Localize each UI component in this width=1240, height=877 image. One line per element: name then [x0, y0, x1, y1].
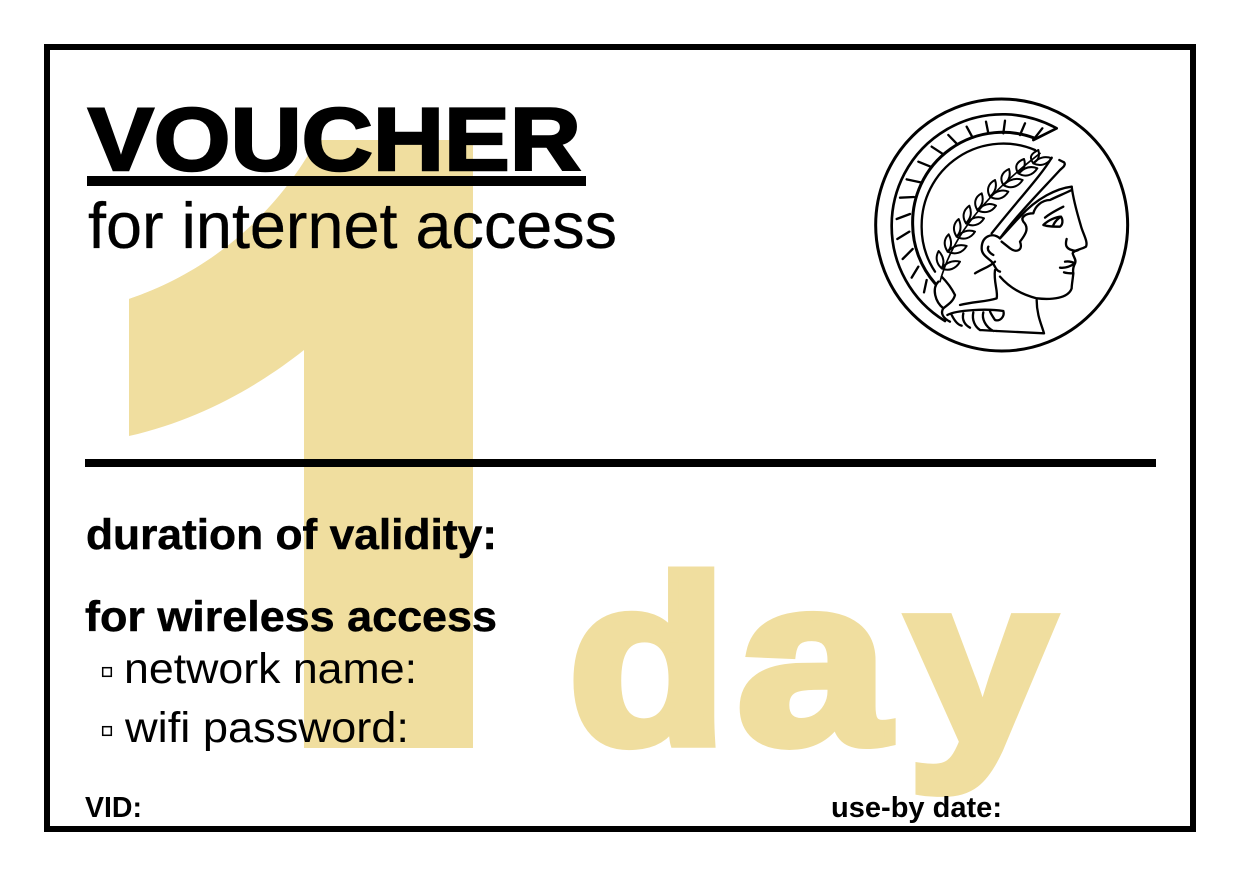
- subtitle: for internet access: [88, 189, 617, 262]
- divider line: [85, 459, 1156, 467]
- big word: day: [568, 528, 1055, 794]
- title underline: [87, 176, 586, 186]
- title: VOUCHER: VOUCHER: [88, 89, 581, 189]
- label: duration of validity: duration of validity:: [86, 511, 497, 559]
- label: use-by date: use-by date:: [831, 792, 1002, 824]
- list item: wifi password: wifi password:: [124, 704, 409, 752]
- label: VID: VID:: [85, 792, 142, 824]
- flag of the big numeral 1: [129, 140, 340, 436]
- icon: Max Planck Minerva logo: [876, 99, 1128, 351]
- heading: wireless access: for wireless access: [85, 593, 497, 641]
- list item: network name: network name:: [124, 645, 417, 693]
- big word: day: y: [907, 529, 1055, 794]
- big word: day: d: [568, 528, 727, 793]
- big word: day: a: [737, 530, 891, 794]
